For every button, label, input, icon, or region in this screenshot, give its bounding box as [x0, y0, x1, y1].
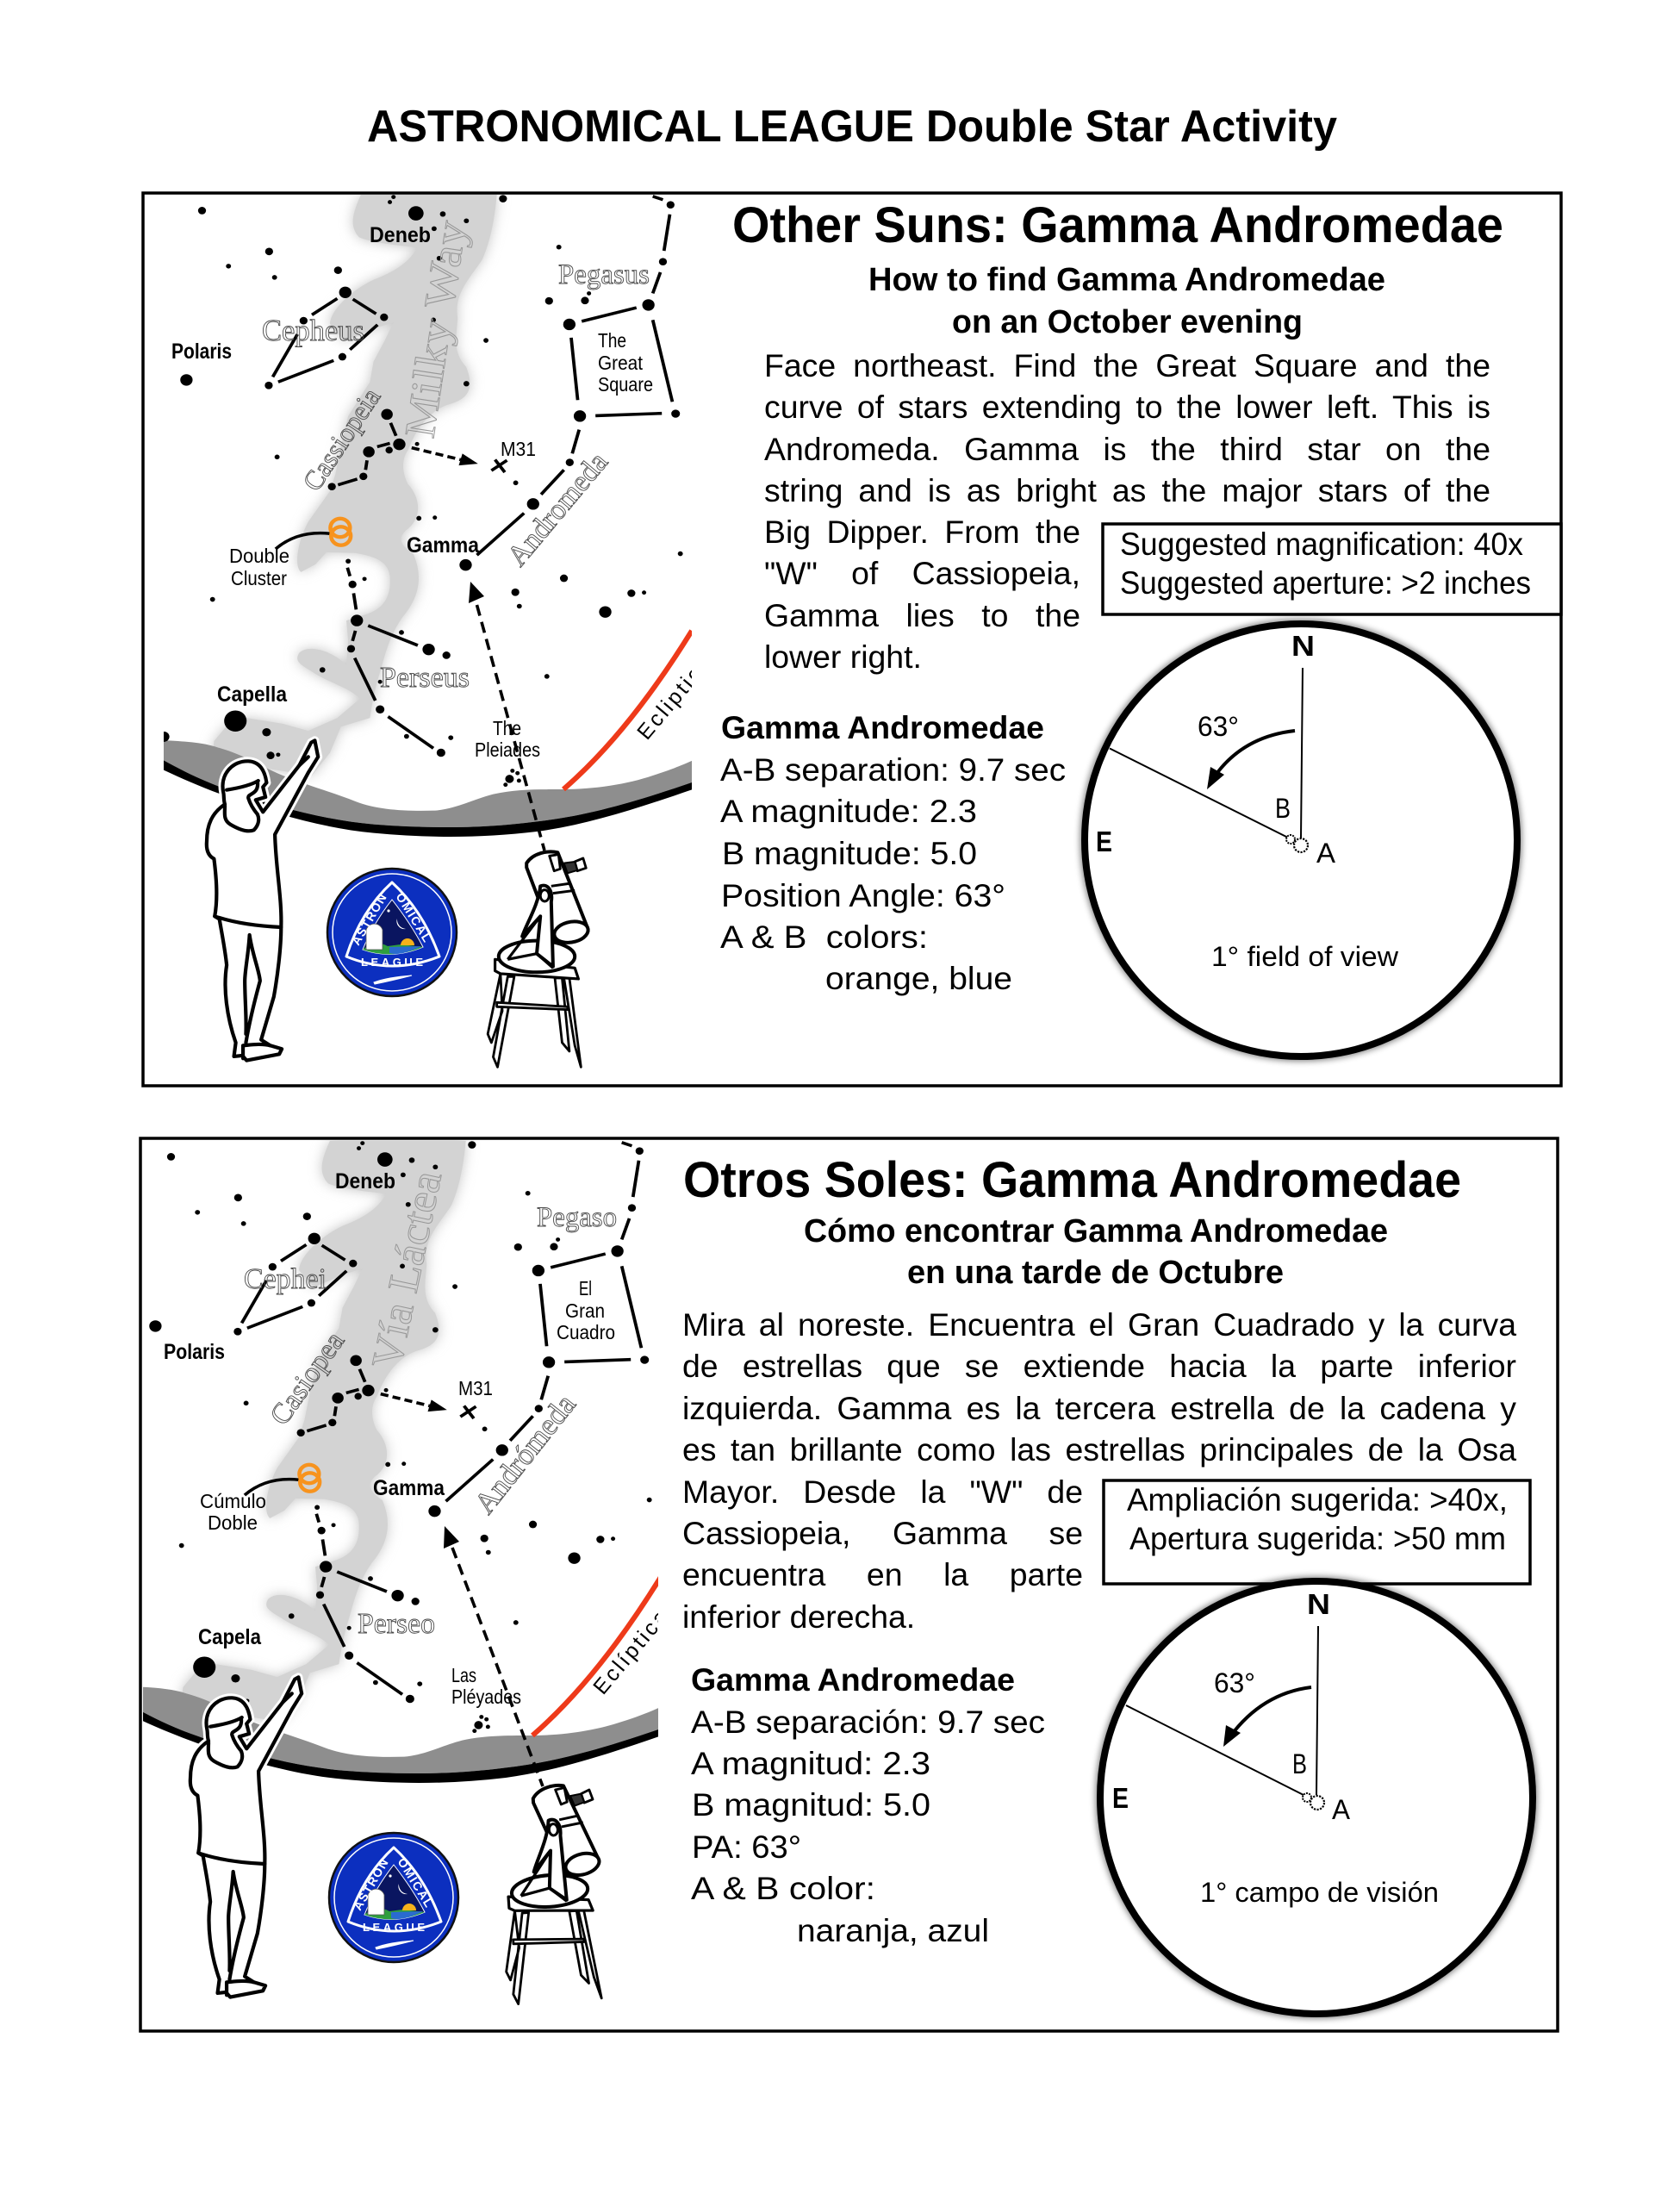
star data list: Gamma Andromedae [721, 710, 1044, 745]
arrow: dashed sight line to telescope [444, 1526, 543, 1786]
map labels: Perseus [380, 662, 470, 694]
subheading [804, 1213, 1388, 1291]
map labels: Capela [198, 1625, 262, 1649]
map labels: Cephei [244, 1263, 327, 1295]
subheading: en una tarde de Octubre [907, 1255, 1284, 1291]
star data list: Gamma Andromedae [691, 1662, 1015, 1698]
map labels: Cassiopeia [296, 382, 386, 496]
star map: October sky [152, 195, 704, 837]
map labels: Ecliptic [632, 661, 708, 745]
map labels: Andrómeda [468, 1387, 582, 1520]
logo: Astronomical League: OMICAL [395, 1855, 436, 1910]
star data list: A magnitude: 2.3 [720, 794, 977, 829]
eyepiece field of view diagram: B [1292, 1748, 1307, 1779]
logo: Astronomical League: LEAGUE [361, 956, 423, 969]
map labels: Deneb [370, 223, 431, 247]
star data list: A & B colors: [720, 919, 928, 955]
map labels: Eclíptica [588, 1604, 675, 1699]
instructions text: curve of stars extending to the lower left. This is [764, 389, 1490, 425]
map labels: Las [451, 1664, 476, 1686]
instructions text: Mayor. Desde la "W" de [682, 1474, 1083, 1510]
instructions text: Face northeast. Find the Great Square and the [764, 347, 1490, 383]
map labels: Double [229, 545, 289, 567]
logo: Astronomical League [327, 869, 457, 996]
star data list: A & B color: [691, 1871, 875, 1906]
eyepiece field of view diagram: A [1332, 1794, 1351, 1825]
star data list: A-B separation: 9.7 sec [720, 752, 1066, 788]
map labels: Gamma [407, 533, 480, 558]
eyepiece field of view diagram: 1° campo de visión [1200, 1877, 1439, 1908]
instructions text: Big Dipper. From the [764, 514, 1080, 550]
icon: telescope on stool [494, 1783, 613, 2004]
map labels: Capella [217, 682, 288, 707]
instructions text: izquierda. Gamma es la tercera estrella de la cadena y [682, 1390, 1516, 1426]
instructions text: Andromeda. Gamma is the third star on the [764, 431, 1490, 467]
map labels [164, 1167, 675, 1708]
eyepiece field of view diagram: N [1291, 630, 1315, 662]
map labels: Pléyades [451, 1686, 521, 1708]
subheading: Cómo encontrar Gamma Andromedae [804, 1213, 1388, 1249]
map labels: The [598, 329, 626, 352]
eyepiece field of view diagram: B [1275, 793, 1291, 824]
map labels: Cepheus [262, 315, 364, 347]
map labels: The [493, 717, 521, 739]
map labels: Polaris [164, 1340, 225, 1364]
eyepiece field of view diagram: N [1307, 1588, 1330, 1620]
instructions text: encuentra en la parte [682, 1556, 1083, 1592]
star data list: orange, blue [825, 961, 1012, 996]
instructions text: es tan brillante como las estrellas principales de la Osa [682, 1431, 1516, 1468]
eyepiece field of view diagram: A [1316, 838, 1336, 869]
logo: Astronomical League: ASTRON [351, 1856, 391, 1913]
map labels: Great [598, 352, 644, 374]
star data list [720, 710, 1066, 996]
eyepiece field of view diagram [1085, 624, 1517, 1056]
panel: English activity [143, 193, 1561, 1086]
eyepiece field of view diagram: 63° [1198, 711, 1239, 742]
star data list: naranja, azul [797, 1913, 989, 1948]
callout: ampliación y apertura sugeridas: Ampliación sugerida: >40x, [1127, 1482, 1508, 1517]
callout: ampliación y apertura sugeridas: Apertura sugerida: >50 mm [1129, 1521, 1506, 1556]
star data list: PA: 63° [692, 1829, 801, 1865]
instructions text: lower right. [764, 639, 922, 675]
instructions text [682, 1304, 1522, 1648]
map labels [171, 217, 708, 761]
star data list: Position Angle: 63° [721, 878, 1005, 913]
map labels: Milky Way [395, 217, 476, 441]
star data list [691, 1662, 1045, 1948]
icon: telescope on stool [488, 851, 592, 1067]
eyepiece field of view diagram [1100, 1581, 1533, 2014]
subheading: How to find Gamma Andromedae [868, 262, 1385, 298]
star data list: B magnitud: 5.0 [692, 1787, 930, 1823]
star data list: A magnitud: 2.3 [691, 1746, 930, 1781]
map labels: M31 [501, 438, 536, 460]
logo: Astronomical League [329, 1833, 458, 1962]
map labels: Cluster [231, 567, 287, 589]
map labels: Vía Láctea [362, 1167, 451, 1373]
logo: Astronomical League: ASTRON [349, 891, 389, 948]
map labels: El [579, 1277, 592, 1299]
panel heading: Otros Soles: Gamma Andromedae [683, 1152, 1461, 1208]
instructions text: "W" of Cassiopeia, [764, 555, 1080, 591]
panel: Spanish activity [121, 1138, 1558, 2031]
star data list: A-B separación: 9.7 sec [691, 1704, 1045, 1740]
arrow: dashed sight line to telescope [469, 582, 544, 851]
subheading: on an October evening [952, 304, 1303, 340]
logo: Astronomical League: OMICAL [393, 890, 434, 944]
eyepiece field of view diagram: 63° [1214, 1667, 1255, 1698]
map labels: Gran [565, 1299, 605, 1322]
instructions text [764, 345, 1496, 689]
eyepiece field of view diagram: E [1112, 1782, 1129, 1814]
map labels: Cúmulo [200, 1490, 266, 1512]
instructions text: de estrellas que se extiende hacia la parte inferior [682, 1348, 1516, 1384]
callout: suggested magnification and aperture: Suggested aperture: >2 inches [1120, 565, 1531, 601]
map labels: Doble [208, 1511, 258, 1534]
callout: suggested magnification and aperture [1103, 524, 1561, 614]
map labels: M31 [458, 1377, 493, 1399]
callout: suggested magnification and aperture: Suggested magnification: 40x [1120, 527, 1523, 562]
title: ASTRONOMICAL LEAGUE Double Star Activity [367, 102, 1337, 152]
map labels: Perseo [358, 1608, 435, 1640]
star map: cielo de octubre [121, 1141, 673, 1783]
instructions text: Cassiopeia, Gamma se [682, 1515, 1083, 1551]
figure: person pointing at the sky [190, 1677, 302, 1997]
map labels: Pleiades [475, 738, 540, 761]
map labels: Pegasus [558, 259, 650, 290]
instructions text: inferior derecha. [682, 1598, 915, 1635]
instructions text: Gamma lies to the [764, 597, 1080, 633]
callout: ampliación y apertura sugeridas [1104, 1480, 1530, 1584]
eyepiece field of view diagram: E [1096, 826, 1112, 857]
map labels: Andromeda [501, 446, 614, 572]
map labels: Casiopea [264, 1326, 351, 1431]
map labels: Cuadro [557, 1321, 615, 1343]
figure: person pointing at the sky [207, 740, 318, 1061]
map labels: Pegaso [537, 1202, 617, 1233]
logo: Astronomical League: LEAGUE [363, 1921, 425, 1934]
map labels: Gamma [373, 1476, 445, 1500]
panel heading: Other Suns: Gamma Andromedae [732, 197, 1503, 253]
instructions text: Mira al noreste. Encuentra el Gran Cuadrado y la curva [682, 1306, 1516, 1343]
map labels: Square [598, 373, 653, 396]
subheading [868, 262, 1385, 340]
instructions text: string and is as bright as the major stars of the [764, 472, 1490, 508]
eyepiece field of view diagram: 1° field of view [1211, 941, 1399, 972]
map labels: Deneb [335, 1169, 395, 1193]
star data list: B magnitude: 5.0 [722, 836, 977, 871]
map labels: Polaris [171, 340, 232, 364]
